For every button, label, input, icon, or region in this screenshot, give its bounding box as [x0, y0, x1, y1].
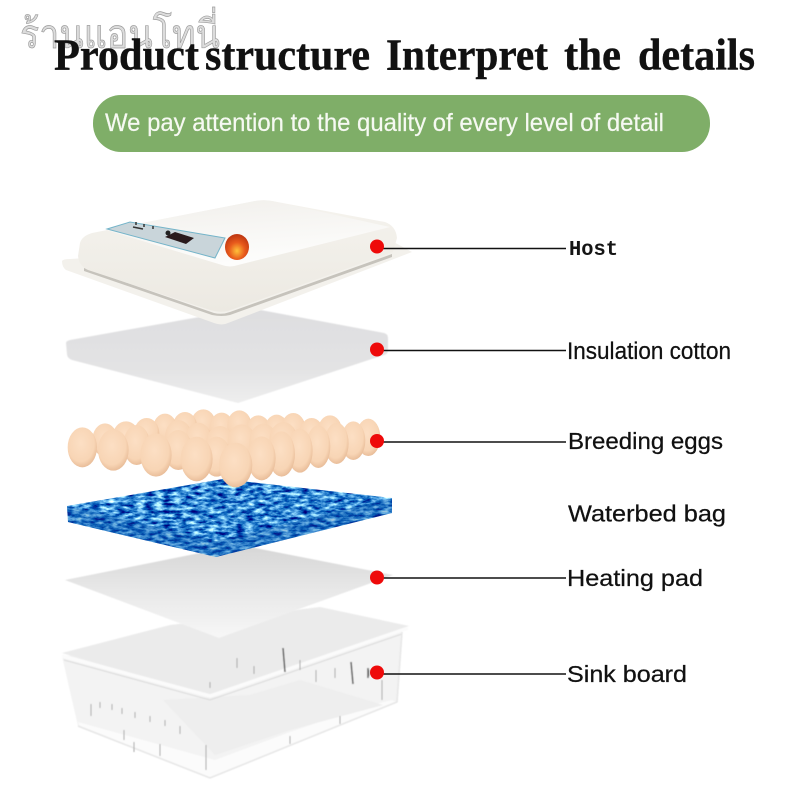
- lid top face: [106, 200, 390, 266]
- candling lamp: [225, 234, 249, 260]
- lid body: [78, 200, 397, 312]
- title: Product: [54, 30, 199, 80]
- callout: Insulation cotton: [370, 338, 731, 365]
- subtitle banner: [93, 95, 710, 152]
- insulation cotton: [66, 308, 388, 403]
- heating pad: [65, 545, 393, 638]
- flange shadow line: [84, 254, 392, 316]
- title: Interpret: [386, 30, 548, 80]
- callout: Host: Host: [569, 239, 618, 262]
- callout: Heating pad: Heating pad: [567, 565, 703, 591]
- callout: Sink board: [370, 661, 687, 687]
- lid flange: [62, 240, 412, 324]
- watermark: ร้านแอนโทนี่: [20, 7, 220, 57]
- title: the: [564, 30, 621, 80]
- subtitle banner: We pay attention to the quality of every level of detail: [105, 109, 664, 137]
- waterbed bag: [67, 479, 392, 557]
- callout: Insulation cotton: Insulation cotton: [567, 338, 731, 365]
- callout: Breeding eggs: [370, 428, 723, 454]
- sink board: transparent tray: [62, 607, 409, 778]
- callout: Host: [370, 239, 618, 262]
- host: incubator lid: [62, 200, 412, 324]
- title: details: [638, 30, 755, 80]
- title: structure: [205, 30, 370, 80]
- callout: Breeding eggs: Breeding eggs: [568, 428, 723, 454]
- control panel: [107, 222, 225, 258]
- callout: Sink board: Sink board: [567, 661, 687, 687]
- title: [54, 30, 755, 80]
- callout: Heating pad: [370, 565, 703, 591]
- breeding eggs: [68, 409, 380, 487]
- label: Waterbed bag: Waterbed bag: [568, 500, 726, 526]
